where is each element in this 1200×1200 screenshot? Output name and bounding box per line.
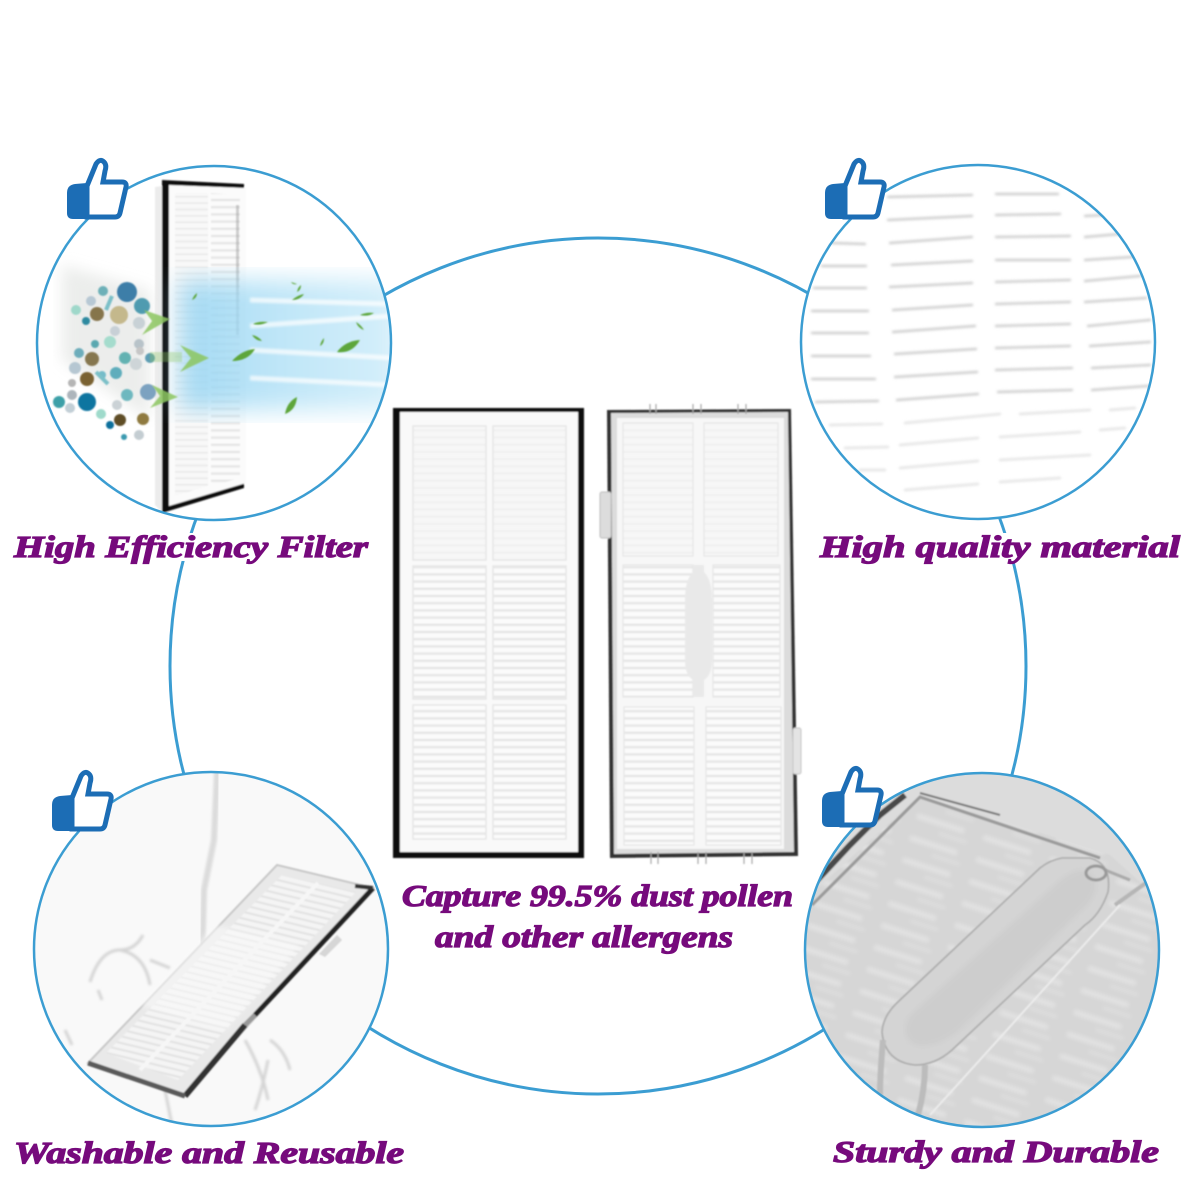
large connecting circle xyxy=(170,238,1026,1094)
panel: washable and reusable xyxy=(34,772,388,1126)
filter in perspective xyxy=(155,180,246,513)
central product: right filter, grey frame xyxy=(600,404,801,864)
icon: thumbs up bottom right xyxy=(822,768,881,827)
smoke xyxy=(62,265,150,420)
panel: high efficiency filter xyxy=(37,166,400,520)
side clips xyxy=(600,492,611,538)
panel: high quality material xyxy=(801,165,1155,519)
frame corner xyxy=(812,792,1146,906)
heading: high efficiency filter: High Efficiency Filter xyxy=(13,529,369,564)
icon: thumbs up bottom left xyxy=(52,772,111,831)
pleat lines xyxy=(812,194,1150,402)
heading: capture dust: Capture 99.5% dust pollen xyxy=(402,878,793,913)
heading: sturdy and durable: Sturdy and Durable xyxy=(833,1134,1159,1169)
water stream xyxy=(202,772,217,965)
centre handle xyxy=(880,858,1120,1115)
heading: capture dust: and other allergens xyxy=(435,919,733,954)
leaves xyxy=(192,282,374,414)
washed filter xyxy=(88,865,373,1097)
heading: washable and reusable: Washable and Reusable xyxy=(14,1135,404,1170)
clean air flow xyxy=(180,280,400,410)
icon: thumbs up top left xyxy=(67,160,126,219)
heading: high quality material: High quality material xyxy=(819,529,1180,564)
panel: sturdy and durable xyxy=(800,770,1165,1130)
central product: left filter, black frame xyxy=(393,408,584,858)
water splashes xyxy=(65,935,290,1125)
heading: capture dust xyxy=(402,878,793,954)
icon: thumbs up top right xyxy=(825,160,884,219)
green arrows xyxy=(142,310,209,408)
dust particles xyxy=(53,282,156,440)
